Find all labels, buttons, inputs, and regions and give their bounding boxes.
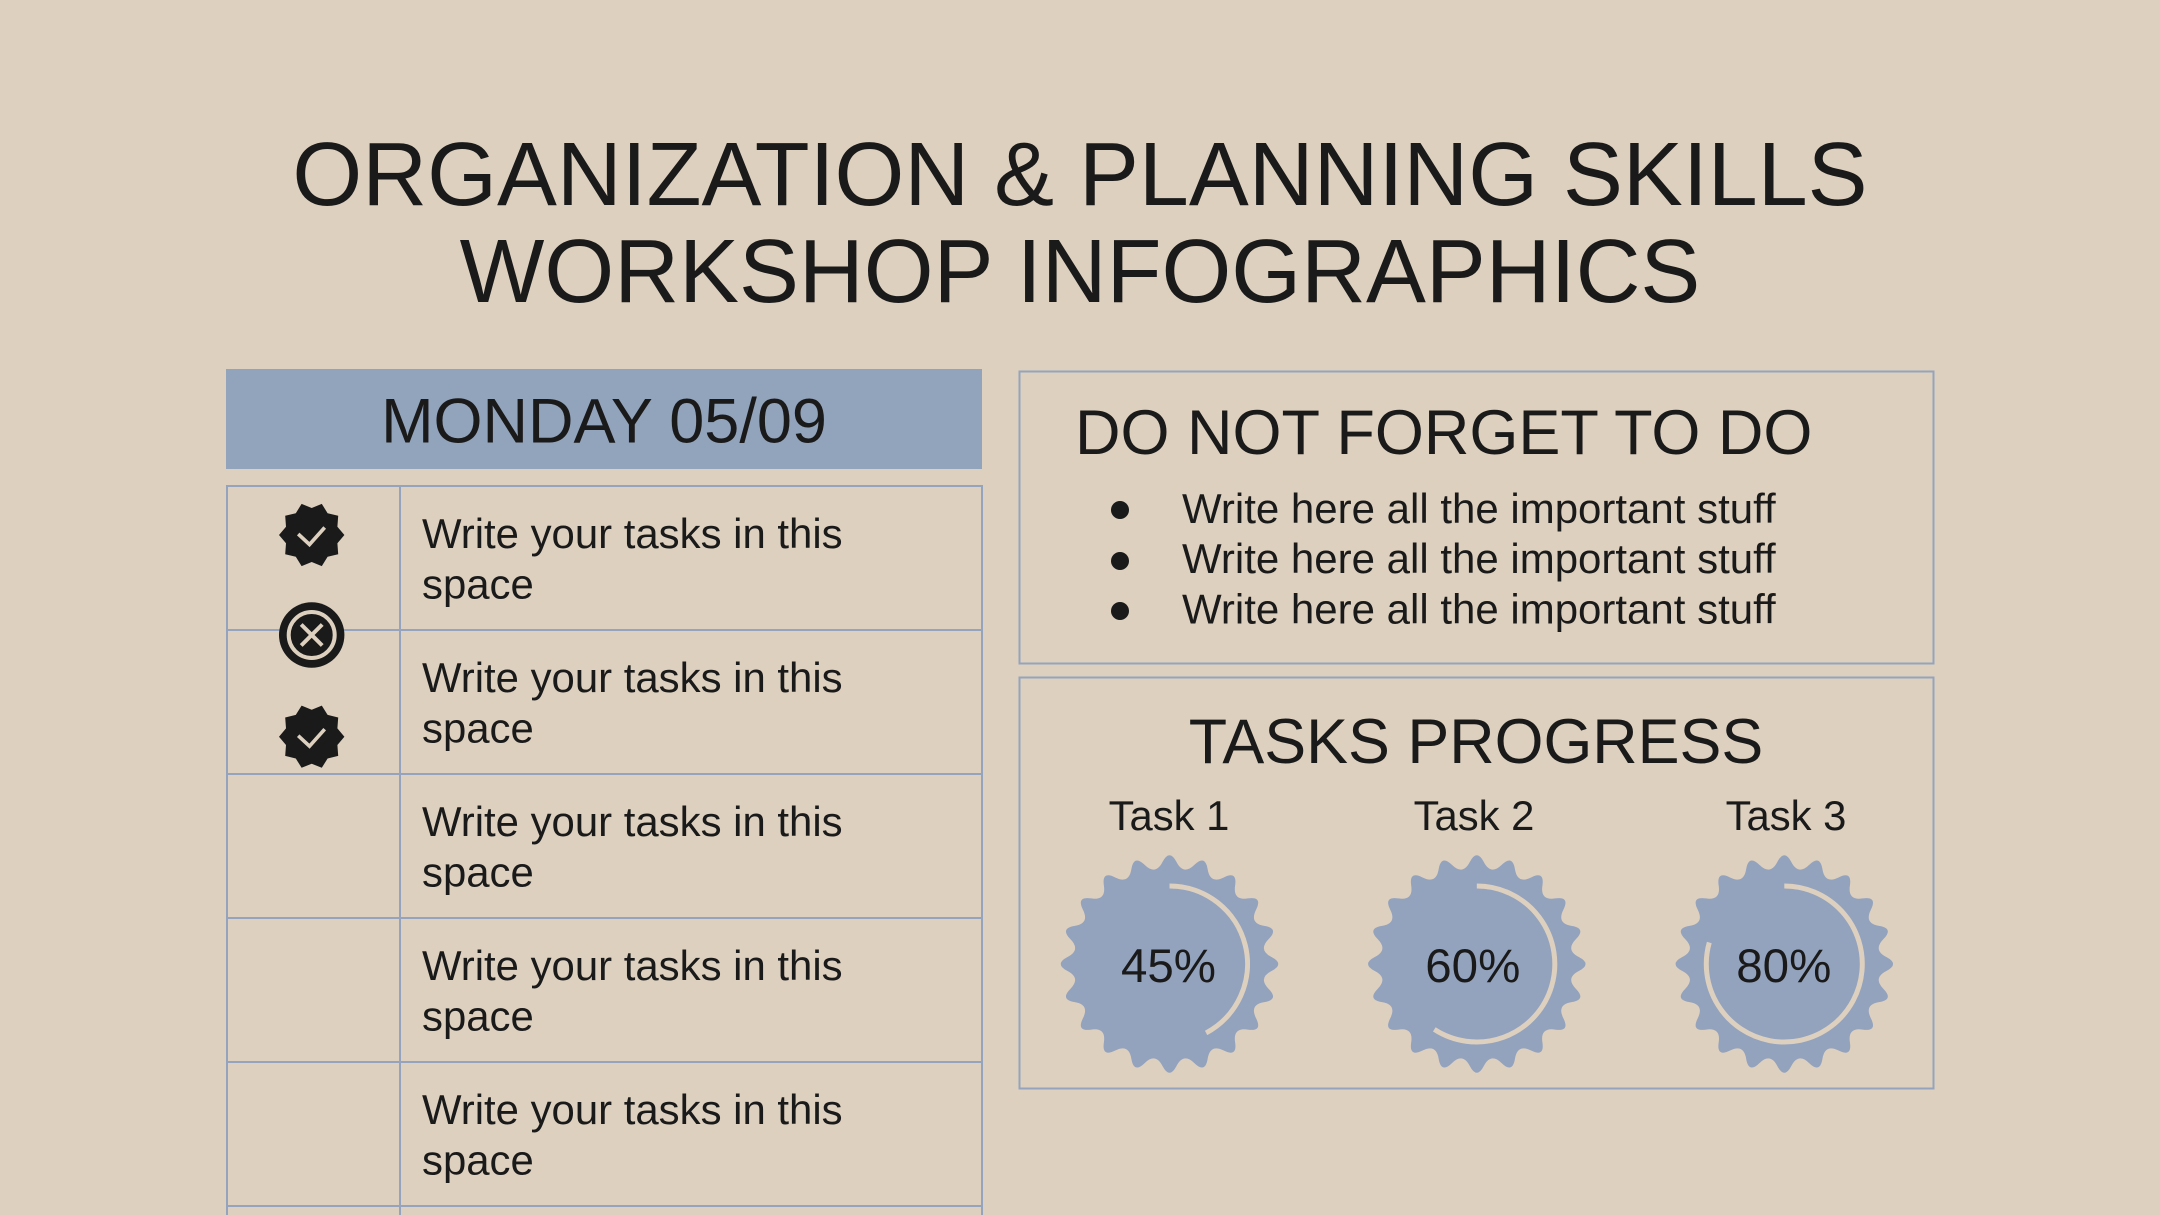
icon: check badge — [279, 504, 344, 566]
progress badge: task 3: 80% — [1736, 940, 1831, 993]
heading: do not forget: DO NOT FORGET TO DO — [1075, 398, 1812, 468]
task labels — [1109, 792, 1846, 839]
heading: tasks progress: TASKS PROGRESS — [1189, 707, 1763, 777]
task rows text: space — [422, 705, 534, 752]
task rows text: Write your tasks in this — [422, 942, 843, 989]
bullet list — [1111, 485, 1776, 632]
task rows text: space — [422, 561, 534, 608]
panel: task table — [227, 486, 982, 1215]
task labels: Task 3 — [1726, 792, 1846, 839]
task rows text: Write your tasks in this — [422, 798, 843, 845]
progress badge: task 1: 45% — [1121, 940, 1216, 993]
task labels: Task 2 — [1414, 792, 1534, 839]
task rows text: Write your tasks in this — [422, 510, 843, 557]
task labels: Task 1 — [1109, 792, 1229, 839]
progress badge: task 2 — [1368, 855, 1586, 1073]
progress badge: task 2: 60% — [1425, 940, 1520, 993]
task rows text: Write your tasks in this — [422, 1086, 843, 1133]
progress badge: task 1 — [1061, 855, 1278, 1073]
panel: tasks progress — [1020, 678, 1934, 1088]
bullet list: Write here all the important stuff — [1182, 586, 1776, 632]
task rows text: Write your tasks in this — [422, 654, 843, 701]
title: ORGANIZATION & PLANNING SKILLS — [292, 125, 1868, 225]
panel: do not forget — [1020, 372, 1934, 664]
task rows text: space — [422, 849, 534, 896]
panel: day header — [226, 369, 982, 469]
task rows text: space — [422, 993, 534, 1040]
bullet list: Write here all the important stuff — [1182, 485, 1776, 532]
task rows text — [422, 510, 843, 1184]
bullet list: Write here all the important stuff — [1182, 535, 1776, 582]
title — [292, 125, 1868, 322]
task rows text: space — [422, 1137, 534, 1184]
icon: check badge — [279, 706, 344, 768]
title: WORKSHOP INFOGRAPHICS — [460, 222, 1700, 322]
icon: cross circle — [279, 602, 344, 668]
panel: day header: MONDAY 05/09 — [381, 386, 827, 456]
progress badge: task 3 — [1676, 855, 1893, 1073]
